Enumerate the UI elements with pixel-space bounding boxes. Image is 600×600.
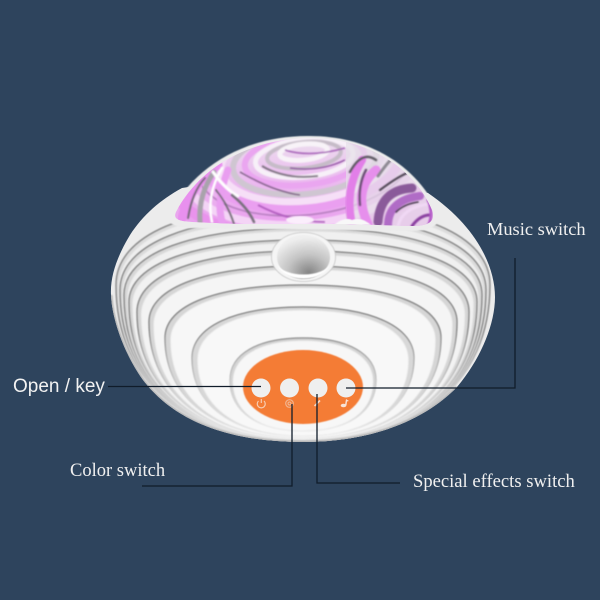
right lens streaks: [346, 142, 433, 226]
button: color switch: [280, 378, 299, 398]
cup hole on top: [272, 232, 336, 282]
label: special effects switch: Special effects switch: [413, 471, 575, 492]
icon: power: [257, 399, 265, 408]
button: music: [336, 378, 356, 398]
lamp device: [110, 135, 495, 442]
button: special effects: [308, 378, 328, 398]
icon: music note: [341, 399, 349, 407]
icon: wand: [314, 400, 320, 406]
icon: color: [286, 400, 293, 407]
button: open key: [252, 378, 270, 398]
label: color switch: Color switch: [70, 461, 165, 481]
left lens streaks: [182, 165, 254, 224]
dome: purple swirl lens: [175, 138, 433, 226]
lamp body with concentric ribs: [110, 187, 495, 442]
label: music switch: Music switch: [487, 219, 586, 239]
orange control panel: [243, 350, 363, 424]
rib groove lines: [116, 205, 490, 442]
label: open / key: Open / key: [13, 376, 105, 397]
white highlight at lens base: [334, 218, 372, 225]
leader lines: [108, 258, 515, 486]
dome rim: [169, 136, 439, 231]
